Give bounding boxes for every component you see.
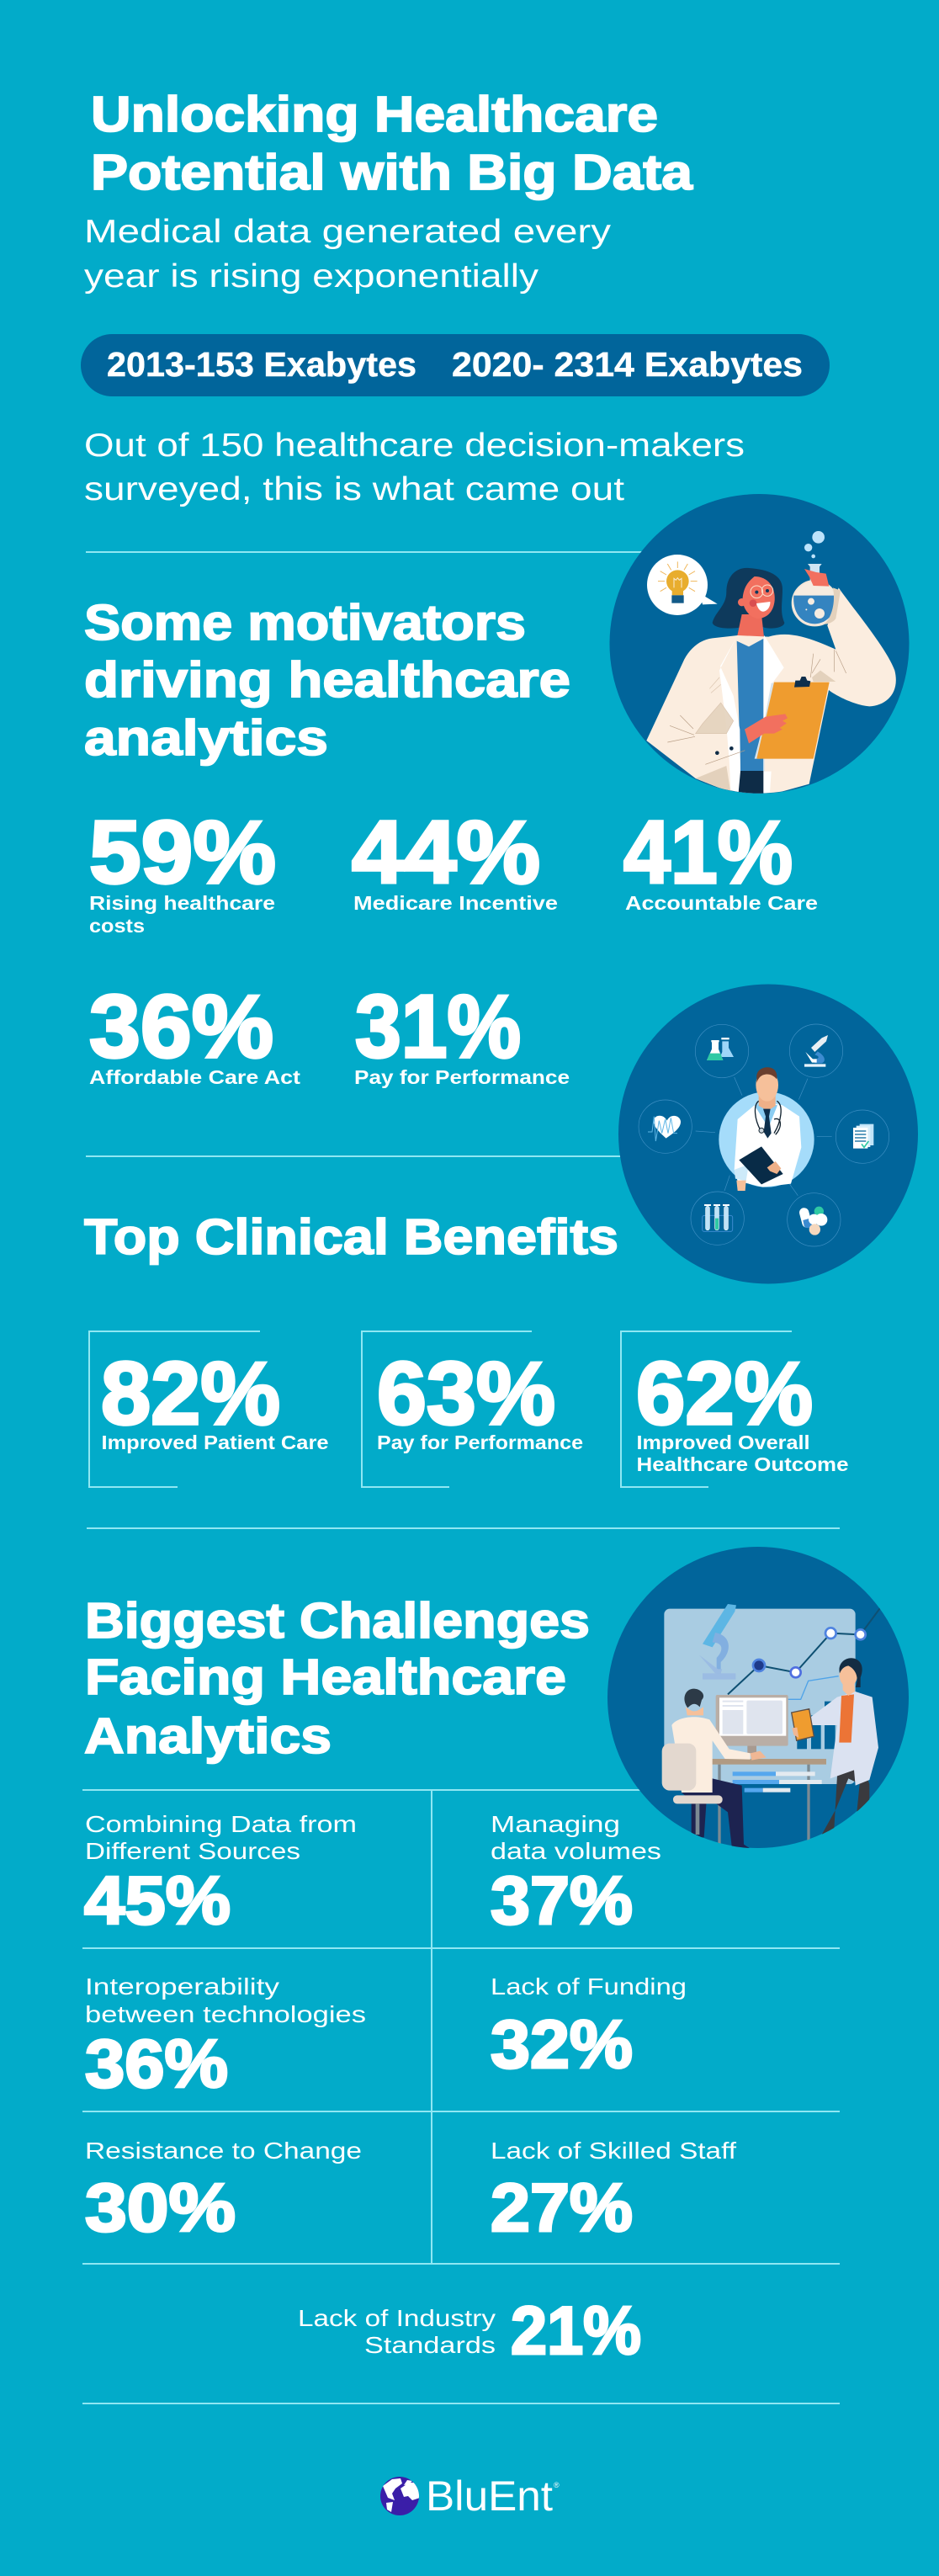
wordmark: BluEnt bbox=[426, 2472, 553, 2520]
logo: BluEnt bbox=[380, 2477, 559, 2515]
doctor bbox=[735, 1067, 801, 1191]
icon: microscope bbox=[804, 1035, 828, 1067]
blue shirt bbox=[737, 638, 764, 772]
challenge: managing data volumes 37% bbox=[491, 1811, 661, 1939]
icon: heart with pulse bbox=[648, 1116, 681, 1141]
challenge: lack of funding 32% bbox=[491, 1973, 687, 2083]
stat: 36%: 36% bbox=[89, 977, 273, 1076]
stat: 59%: costs bbox=[89, 915, 145, 937]
challenge: lack of industry standards 21%: Lack of Industry bbox=[298, 2305, 496, 2331]
stat: 41%: 41% bbox=[623, 803, 793, 902]
title: Unlocking Healthcare bbox=[91, 87, 658, 142]
line chart bbox=[728, 1607, 881, 1699]
light blue disc behind doctor bbox=[719, 1091, 814, 1187]
icon: test tubes bbox=[703, 1205, 733, 1231]
challenge: interoperability 36%: Interoperability bbox=[85, 1973, 279, 2000]
survey intro text: surveyed, this is what came out bbox=[84, 471, 624, 507]
challenge: lack of industry standards 21% bbox=[298, 2293, 641, 2369]
stat: 41%: Accountable Care bbox=[625, 892, 818, 914]
challenge: lack of industry standards 21%: 21% bbox=[511, 2293, 641, 2369]
challenge: lack of skilled staff 27% bbox=[491, 2138, 736, 2246]
benefit card: 82% bbox=[89, 1331, 328, 1487]
orange clipboard bbox=[755, 677, 830, 759]
title: Potential with Big Data bbox=[91, 145, 693, 200]
subtitle: medical data rising bbox=[84, 214, 612, 295]
bubbles bbox=[804, 531, 825, 558]
challenge: lack of funding 32%: Lack of Funding bbox=[491, 1973, 687, 2000]
logo: BluEnt: ® bbox=[554, 2481, 560, 2489]
section heading: clinical benefits: Top Clinical Benefits bbox=[84, 1209, 618, 1265]
challenge: combining data 45%: 45% bbox=[84, 1863, 231, 1939]
subtitle: medical data rising: year is rising exponentially bbox=[84, 258, 539, 295]
stat: 36%: Affordable Care Act bbox=[89, 1066, 300, 1088]
section heading: motivators bbox=[84, 595, 570, 766]
title bbox=[91, 87, 693, 200]
exabytes pill bbox=[81, 334, 830, 396]
challenge: lack of skilled staff 27%: 27% bbox=[491, 2170, 633, 2246]
benefit card: 63%: 63% bbox=[377, 1344, 555, 1443]
white lapels bbox=[719, 635, 784, 794]
stat: 44%: 44% bbox=[352, 803, 540, 902]
section heading: challenges: Analytics bbox=[84, 1708, 332, 1764]
computer monitor bbox=[716, 1695, 788, 1753]
exabytes pill: 2013-153 Exabytes bbox=[107, 345, 416, 384]
icon: pills bbox=[798, 1207, 827, 1235]
section heading: challenges: Biggest Challenges bbox=[85, 1593, 590, 1649]
stat: 31%: Pay for Performance bbox=[354, 1066, 570, 1088]
challenge: resistance to change 30%: 30% bbox=[85, 2170, 236, 2246]
stat: 59%: Rising healthcare bbox=[89, 892, 275, 914]
benefit card: 82%: Improved Patient Care bbox=[101, 1431, 328, 1453]
challenge: lack of industry standards 21%: Standards bbox=[364, 2332, 496, 2358]
challenge: combining data 45%: Combining Data from bbox=[85, 1811, 357, 1837]
hand on clipboard bbox=[745, 714, 788, 743]
survey intro text bbox=[84, 428, 745, 507]
illustration: analysts with chart and computer bbox=[607, 1547, 909, 1849]
challenge: resistance to change 30%: Resistance to Change bbox=[85, 2138, 362, 2164]
challenge: managing data volumes 37%: Managing bbox=[491, 1811, 620, 1837]
section heading: motivators: analytics bbox=[84, 710, 328, 766]
section heading: challenges: Facing Healthcare bbox=[85, 1649, 566, 1705]
lab coat bbox=[646, 587, 896, 795]
icon: flasks bbox=[707, 1038, 734, 1060]
seated man bbox=[662, 1689, 767, 1849]
stat: 59%: 59% bbox=[89, 803, 276, 902]
benefit card: 63% bbox=[362, 1331, 583, 1487]
board microscope bbox=[699, 1604, 736, 1680]
illustration: scientist with flask and clipboard bbox=[609, 494, 909, 795]
benefit card: 62%: 62% bbox=[636, 1344, 813, 1443]
benefit card: 82%: 82% bbox=[101, 1344, 280, 1443]
challenge: combining data 45%: Different Sources bbox=[85, 1838, 300, 1864]
desk bbox=[710, 1759, 826, 1846]
challenge: interoperability 36%: between technologies bbox=[85, 2001, 366, 2027]
challenge: managing data volumes 37%: data volumes bbox=[491, 1838, 661, 1864]
icon rings bbox=[639, 1024, 889, 1246]
connector lines bbox=[696, 1077, 832, 1196]
round flask bbox=[793, 564, 837, 625]
stat: 44%: Medicare Incentive bbox=[353, 892, 558, 914]
woman's hair bbox=[713, 568, 784, 629]
stat: 31%: 31% bbox=[355, 977, 521, 1076]
challenge: resistance to change 30% bbox=[85, 2138, 362, 2246]
icon: light bulb speech bubble bbox=[647, 555, 718, 615]
section heading: motivators: driving healthcare bbox=[84, 652, 570, 708]
standing woman bbox=[792, 1658, 878, 1839]
icon: document bbox=[853, 1124, 873, 1149]
benefit card: 63%: Pay for Performance bbox=[377, 1431, 583, 1453]
woman's neck bbox=[737, 614, 764, 636]
section heading: motivators: Some motivators bbox=[84, 595, 526, 651]
challenge: interoperability 36% bbox=[85, 1973, 366, 2102]
challenge: combining data 45% bbox=[84, 1811, 357, 1939]
challenge: interoperability 36%: 36% bbox=[85, 2026, 228, 2102]
section heading: challenges bbox=[84, 1593, 590, 1764]
woman's face bbox=[743, 576, 775, 619]
benefit card: 62% bbox=[621, 1331, 848, 1487]
challenge: lack of skilled staff 27%: Lack of Skilled Staff bbox=[491, 2138, 736, 2164]
benefit card: 62%: Improved Overall bbox=[636, 1431, 809, 1453]
bars bbox=[797, 1702, 836, 1749]
illustration: doctor with medical icons bbox=[618, 985, 918, 1284]
dark trousers bbox=[739, 771, 764, 794]
challenge: lack of funding 32%: 32% bbox=[491, 2007, 633, 2083]
chart board bbox=[664, 1609, 856, 1784]
subtitle: medical data rising: Medical data generated every bbox=[84, 214, 612, 250]
icon: globe bbox=[380, 2477, 420, 2515]
challenge: managing data volumes 37%: 37% bbox=[491, 1863, 633, 1939]
benefit card: 62%: Healthcare Outcome bbox=[636, 1453, 848, 1475]
exabytes pill: 2020- 2314 Exabytes bbox=[452, 345, 803, 384]
survey intro text: Out of 150 healthcare decision-makers bbox=[84, 428, 745, 464]
